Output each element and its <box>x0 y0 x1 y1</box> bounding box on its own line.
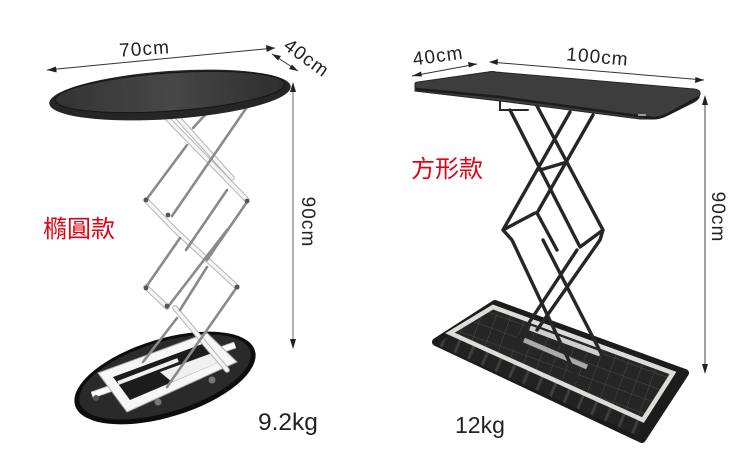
oval table top <box>48 63 292 127</box>
oval table scissor frame <box>143 107 249 387</box>
dimension: 90cm oval <box>290 82 318 349</box>
dimension: 70cm: 70cm <box>119 37 171 62</box>
square table base <box>436 304 685 439</box>
label: square model: 方形款 <box>411 156 483 183</box>
oval table <box>48 63 292 443</box>
dimension: 90cm square <box>702 95 728 374</box>
dimension: 90cm oval: 90cm <box>297 197 318 247</box>
square table scissor frame <box>500 100 603 380</box>
dimension: 40cm square: 40cm <box>412 43 465 70</box>
dimension: 70cm <box>47 37 275 72</box>
dimension: 90cm square: 90cm <box>707 192 728 242</box>
weight: square: 12kg <box>455 412 505 438</box>
label: oval model: 橢圓款 <box>43 216 115 243</box>
dimension: 100cm <box>489 44 704 83</box>
dimension: 40cm oval: 40cm <box>279 35 333 82</box>
oval table base <box>64 313 266 443</box>
weight: oval: 9.2kg <box>258 409 318 436</box>
dimension: 100cm: 100cm <box>565 44 630 71</box>
square table <box>415 72 700 439</box>
square table top <box>415 72 700 119</box>
dimension: 40cm square <box>412 43 477 76</box>
